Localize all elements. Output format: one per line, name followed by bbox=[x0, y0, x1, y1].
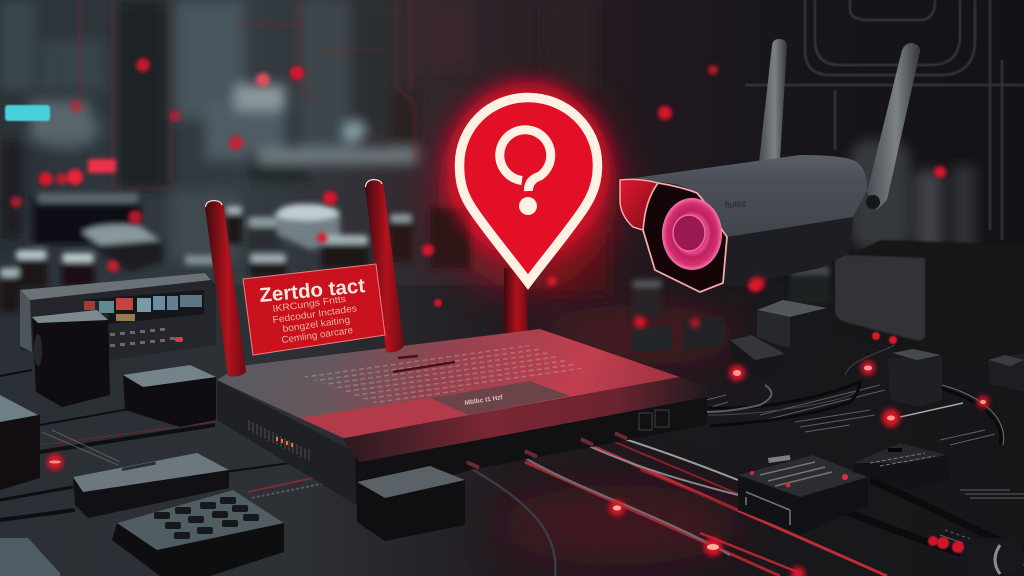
label body text: bongzel kaiting bbox=[282, 315, 351, 335]
camera brand: fiutez bbox=[724, 198, 747, 210]
router status leds bbox=[276, 437, 293, 447]
keypad lower base bbox=[112, 490, 284, 576]
keypad upper box bbox=[73, 470, 229, 518]
blurred machinery background bbox=[0, 0, 976, 295]
box in front of router bbox=[357, 466, 465, 541]
label body text bbox=[272, 294, 358, 346]
box, bottom corner bbox=[0, 538, 60, 576]
security camera bbox=[620, 39, 920, 292]
floor surface bbox=[0, 285, 1024, 576]
large dark device, right bbox=[833, 240, 1024, 360]
circuit module 2, lower right bbox=[853, 443, 950, 490]
router speaker grille bbox=[300, 345, 585, 405]
location pin with question mark bbox=[446, 82, 610, 282]
blurred red tracery bbox=[80, 0, 415, 188]
small right box bbox=[988, 353, 1024, 392]
pin glow bbox=[446, 82, 610, 258]
blurred red haze around pin bbox=[438, 90, 740, 565]
router bevel band bbox=[343, 377, 707, 462]
circuit board markings bbox=[706, 385, 1024, 565]
router top face bbox=[217, 329, 680, 438]
keypad device bbox=[73, 453, 284, 576]
equipment panel, left bbox=[20, 273, 216, 360]
router vents bbox=[249, 420, 309, 460]
blurred teal screen bbox=[5, 105, 50, 121]
cube, far left bbox=[0, 395, 40, 490]
box near router bbox=[632, 316, 724, 352]
router bbox=[217, 329, 707, 505]
bench cylinders bbox=[16, 252, 47, 288]
cube bbox=[757, 300, 827, 348]
label body text: IKRCungs Fntts bbox=[272, 294, 347, 315]
background wall bbox=[0, 0, 1024, 300]
question mark bbox=[500, 130, 551, 215]
camera antenna right bbox=[867, 43, 920, 210]
router nameplate bbox=[431, 381, 570, 415]
blurred circuit lines bbox=[745, 0, 1024, 240]
box, centre left bbox=[123, 365, 216, 427]
router slots bbox=[393, 356, 455, 372]
camera lens bbox=[662, 198, 722, 270]
router left antenna bbox=[205, 200, 246, 376]
cables and red traces bbox=[0, 345, 1024, 576]
router nameplate: Mblbc t1 Hzf bbox=[464, 394, 504, 407]
label body text: Cemling oarcare bbox=[281, 325, 354, 346]
camera under glow bbox=[749, 277, 765, 289]
blurred dark box bbox=[33, 198, 140, 244]
pin body bbox=[460, 98, 598, 282]
small boxes, mid right bbox=[632, 300, 1024, 407]
background bench machines bbox=[0, 193, 830, 318]
circuit module, lower right bbox=[738, 455, 868, 535]
camera underside bbox=[723, 217, 853, 287]
label body text: Fedcodur Inctades bbox=[272, 303, 358, 326]
router ports bbox=[639, 410, 669, 430]
camera lens housing bbox=[643, 183, 727, 292]
router right antenna bbox=[365, 179, 404, 352]
camera antenna left bbox=[759, 39, 787, 162]
background red lights bbox=[10, 58, 946, 292]
router body sides bbox=[217, 380, 356, 505]
router centre antenna bbox=[504, 268, 528, 334]
blurred rounded box bbox=[82, 225, 163, 272]
cable plugs bbox=[466, 431, 628, 470]
black cube, left bbox=[32, 310, 110, 407]
panel readout bbox=[84, 295, 202, 321]
dark cube bbox=[888, 349, 942, 407]
camera body top bbox=[620, 155, 867, 237]
keypad keys bbox=[154, 497, 259, 539]
red warning label bbox=[243, 264, 385, 355]
camera hood interior bbox=[620, 179, 658, 230]
router red panel bbox=[300, 398, 468, 438]
label heading: Zertdo tact bbox=[258, 275, 366, 307]
plug, bottom right bbox=[960, 538, 1024, 574]
red floor lights bbox=[47, 299, 989, 576]
connector bbox=[728, 334, 795, 382]
